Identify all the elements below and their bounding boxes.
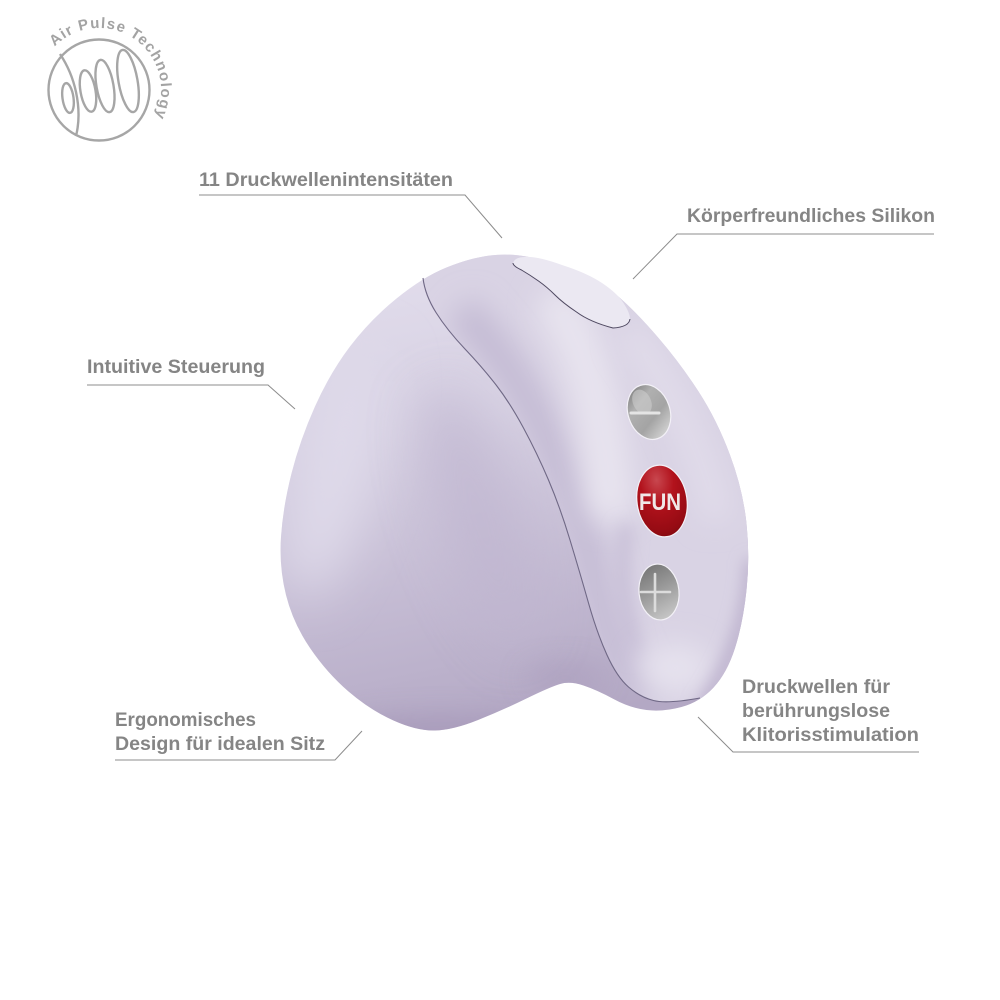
seam line — [423, 278, 700, 702]
callout: Druckwellen — [698, 677, 919, 752]
callout: Druckwellen: Klitorisstimulation — [742, 725, 919, 746]
callout: 11 Druckwellenintensitäten: 11 Druckwellenintensitäten — [199, 170, 453, 191]
control face shading — [424, 254, 748, 702]
plus button — [636, 562, 682, 622]
callout: Ergonomisches Design: Design für idealen Sitz — [115, 734, 325, 755]
callout: Ergonomisches Design — [115, 710, 362, 760]
FUN button — [632, 462, 692, 540]
callout: Körperfreundliches Silikon — [633, 206, 935, 279]
callout: Intuitive Steuerung — [87, 357, 295, 409]
minus button — [620, 379, 678, 445]
top button — [513, 257, 630, 328]
left side shading — [282, 390, 586, 730]
FUN button: FUN — [639, 489, 681, 516]
callout: 11 Druckwellenintensitäten — [199, 170, 502, 238]
callout: Druckwellen: Druckwellen für — [742, 677, 891, 698]
device body — [280, 254, 748, 730]
callout: Ergonomisches Design: Ergonomisches — [115, 710, 256, 731]
callout: Intuitive Steuerung: Intuitive Steuerung — [87, 357, 265, 378]
logo: Air Pulse Technology: Air Pulse Technology — [51, 17, 172, 120]
top button edge — [513, 263, 630, 328]
callout: Körperfreundliches Silikon: Körperfreundliches Silikon — [687, 206, 935, 227]
callout: Druckwellen: berührungslose — [742, 701, 890, 722]
